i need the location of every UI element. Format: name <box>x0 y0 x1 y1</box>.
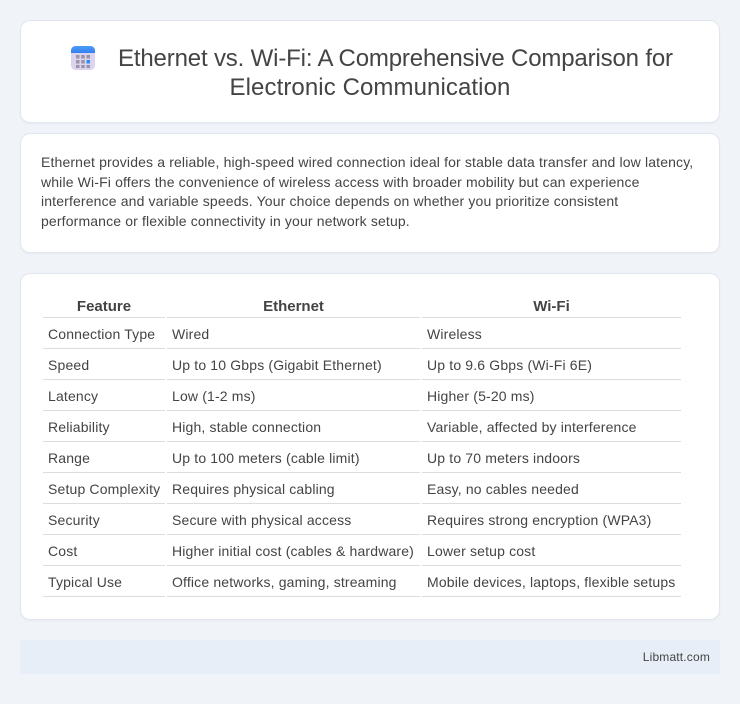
text: Low (1-2 ms) <box>172 388 256 404</box>
row: range <box>43 450 681 473</box>
text: Easy, no cables needed <box>427 481 579 497</box>
row: latency <box>43 388 681 411</box>
comparison table panel <box>20 273 720 620</box>
text: Wi-Fi <box>533 298 570 315</box>
text: Reliability <box>48 419 110 435</box>
intro panel <box>20 133 720 253</box>
text: Wireless <box>427 326 482 342</box>
text: Up to 70 meters indoors <box>427 450 580 466</box>
text: Speed <box>48 357 89 373</box>
footer bar <box>20 640 720 674</box>
text: Secure with physical access <box>172 512 351 528</box>
intro text: interference and variable speeds. Your choice depends on whether you prioritize consistent <box>41 193 618 209</box>
row: cost <box>43 543 681 566</box>
icon: calendar <box>71 46 95 70</box>
intro text: performance or flexible connectivity in your network setup. <box>41 212 410 228</box>
text: Latency <box>48 388 98 404</box>
text: Requires strong encryption (WPA3) <box>427 512 651 528</box>
row: speed <box>43 357 681 380</box>
text: Mobile devices, laptops, flexible setups <box>427 574 675 590</box>
title: Electronic Communication <box>230 74 510 101</box>
text: Requires physical cabling <box>172 481 335 497</box>
text: Feature <box>77 298 131 315</box>
text: Up to 10 Gbps (Gigabit Ethernet) <box>172 357 382 373</box>
text: Connection Type <box>48 326 155 342</box>
text: Higher initial cost (cables & hardware) <box>172 543 414 559</box>
text: Up to 9.6 Gbps (Wi-Fi 6E) <box>427 357 592 373</box>
title: Ethernet vs. Wi-Fi: A Comprehensive Comparison for <box>118 45 673 72</box>
text: Variable, affected by interference <box>427 419 637 435</box>
text: Office networks, gaming, streaming <box>172 574 397 590</box>
header panel <box>20 20 720 123</box>
text: Up to 100 meters (cable limit) <box>172 450 360 466</box>
title <box>118 45 673 101</box>
text: Range <box>48 450 90 466</box>
row: typical use <box>43 574 681 597</box>
text: Typical Use <box>48 574 122 590</box>
text: High, stable connection <box>172 419 321 435</box>
text: Wired <box>172 326 209 342</box>
text: Lower setup cost <box>427 543 535 559</box>
row: security <box>43 512 681 535</box>
intro text <box>41 154 693 229</box>
footer text: Libmatt.com <box>643 650 710 664</box>
row: reliability <box>43 419 681 442</box>
comparison table <box>43 298 681 597</box>
table header <box>43 298 681 318</box>
text: Cost <box>48 543 77 559</box>
row: connection type <box>43 326 681 349</box>
text: Ethernet <box>263 298 324 315</box>
intro text: Ethernet provides a reliable, high-speed wired connection ideal for stable data transfer and low latency, <box>41 154 693 170</box>
text: Setup Complexity <box>48 481 160 497</box>
text: Security <box>48 512 100 528</box>
row: setup complexity <box>43 481 681 504</box>
text: Higher (5-20 ms) <box>427 388 535 404</box>
intro text: while Wi-Fi offers the convenience of wireless access with broader mobility but can experience <box>41 174 640 190</box>
